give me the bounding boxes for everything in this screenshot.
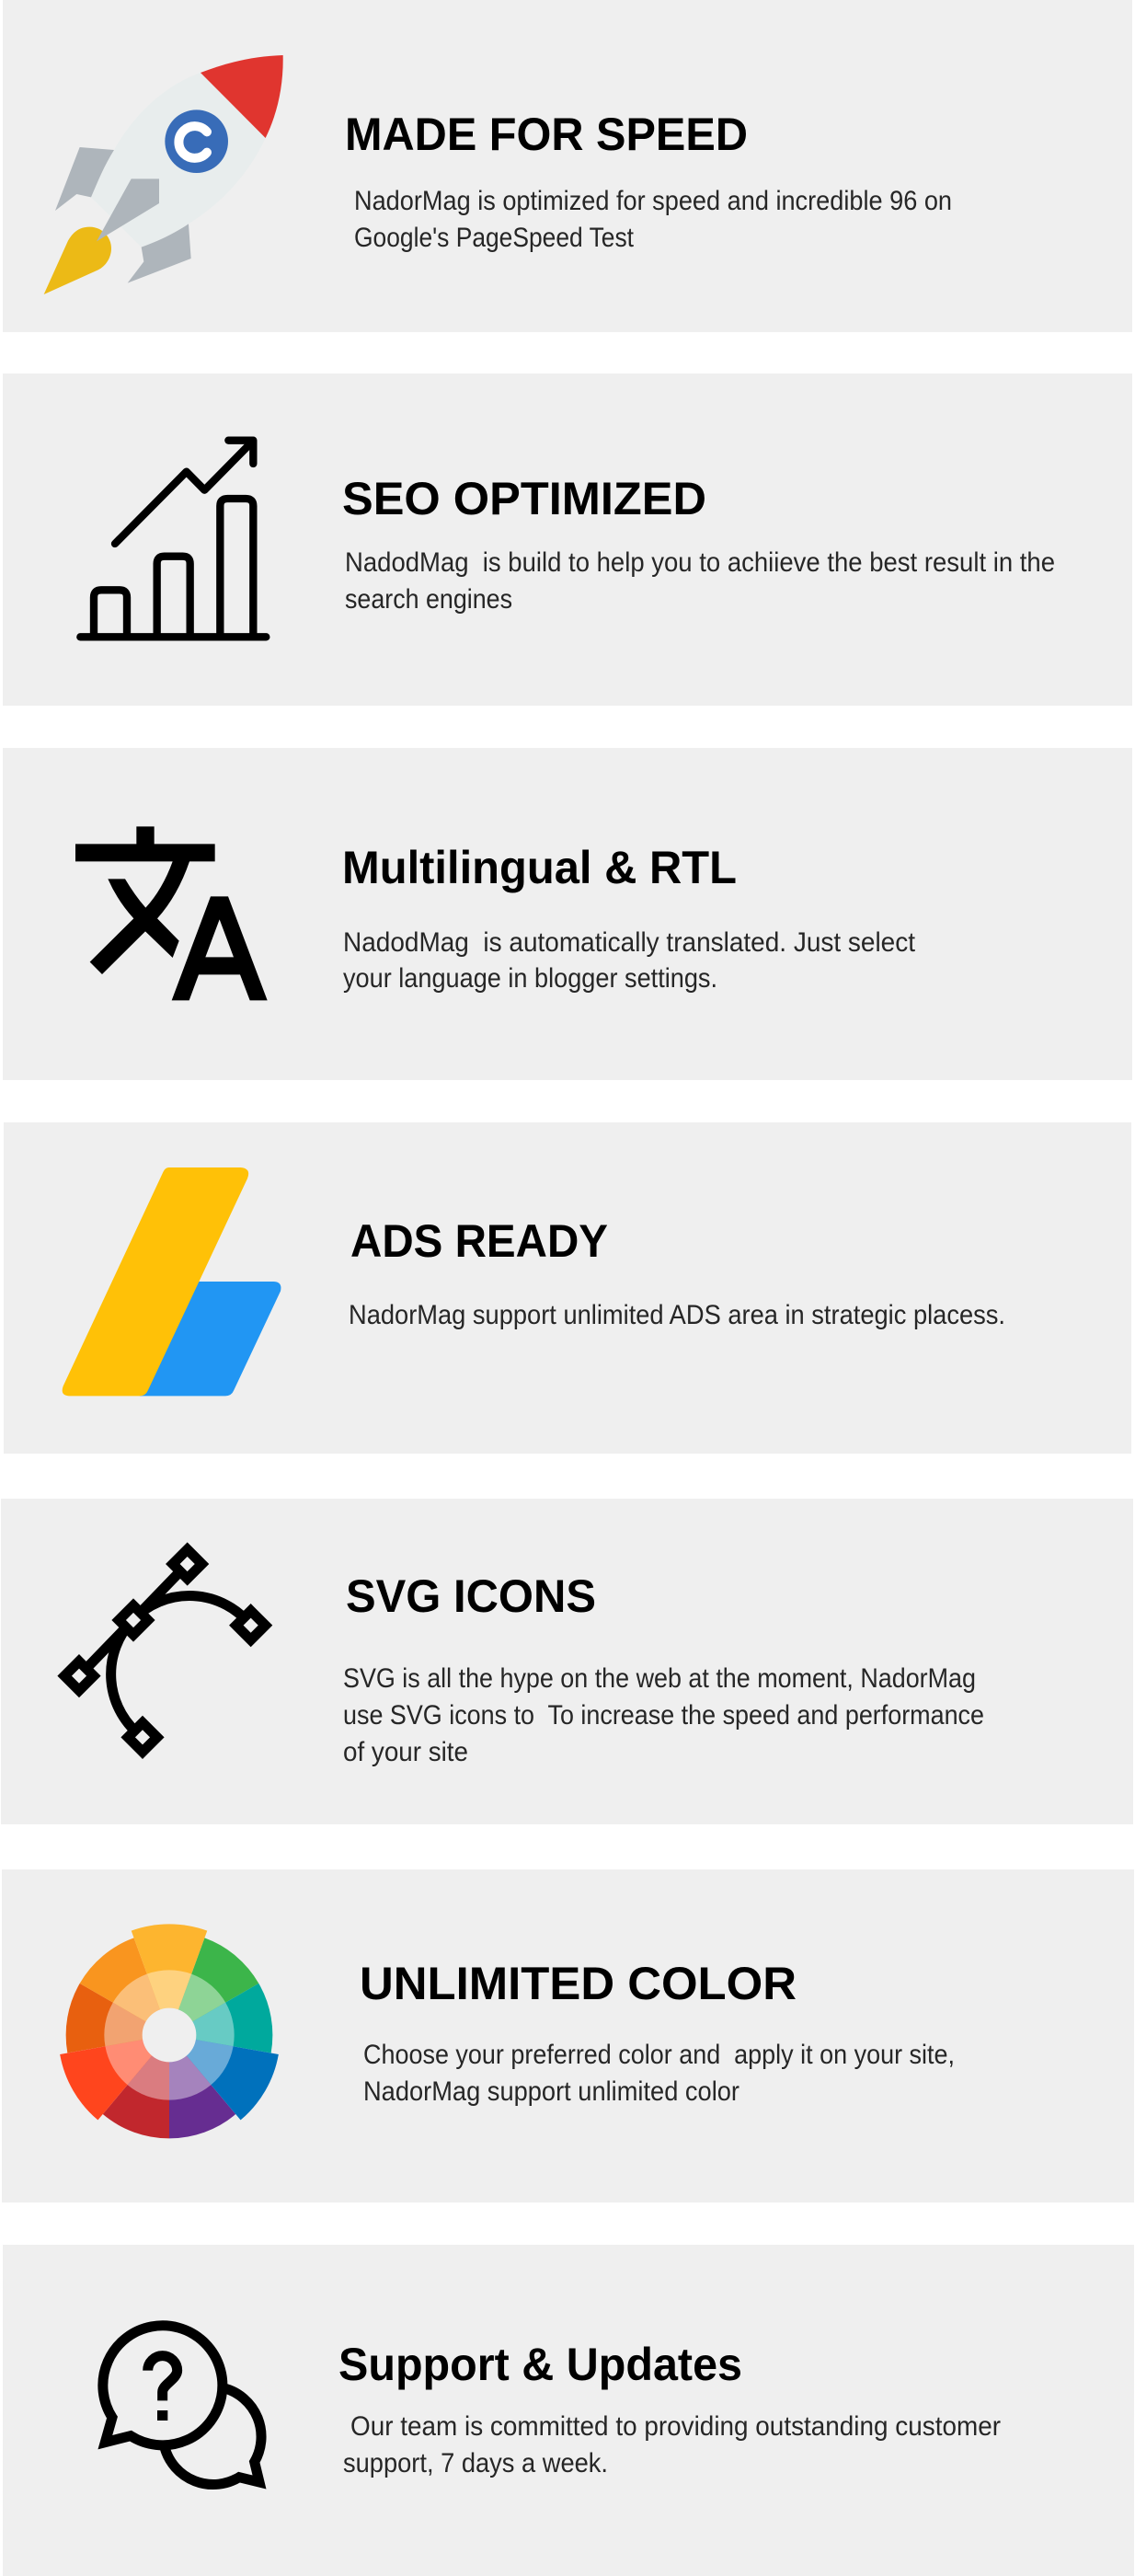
heading: unlimited color: UNLIMITED COLOR	[360, 1958, 797, 2009]
icon: bezier curve	[64, 1549, 265, 1752]
icon: rocket	[44, 55, 283, 294]
heading: support and updates: Support & Updates	[338, 2339, 742, 2390]
panel: svg icons	[1, 1499, 1133, 1824]
panel: support and updates	[3, 2245, 1134, 2576]
text: seo description: NadodMag is build to help you to achiieve the best result in the	[345, 547, 1055, 578]
panel: multilingual and rtl	[3, 748, 1132, 1080]
text: multilingual description: your language in blogger settings.	[343, 963, 717, 994]
heading: seo optimized: SEO OPTIMIZED	[342, 473, 706, 524]
text: made for speed description: NadorMag is optimized for speed and incredible 96 on	[354, 186, 952, 216]
heading: made for speed: MADE FOR SPEED	[345, 109, 748, 160]
text: svg description: use SVG icons to To increase the speed and performance	[343, 1700, 984, 1731]
icon: translate	[75, 826, 268, 1000]
heading: multilingual and rtl: Multilingual & RTL	[342, 842, 737, 893]
text: support description: support, 7 days a week.	[343, 2448, 608, 2478]
text: svg description: SVG is all the hype on the web at the moment, NadorMag	[343, 1663, 976, 1694]
panel: unlimited color	[2, 1869, 1134, 2202]
text: made for speed description: Google's PageSpeed Test	[354, 223, 635, 253]
text: multilingual description	[343, 927, 916, 994]
heading: svg icons: SVG ICONS	[346, 1570, 596, 1622]
icon: growth bar chart	[80, 441, 266, 637]
panel: ads ready	[4, 1122, 1131, 1454]
heading: ads ready: ADS READY	[350, 1215, 608, 1267]
icon: adsense logo	[63, 1167, 281, 1396]
text: support description: Our team is committed to providing outstanding customer	[350, 2411, 1001, 2442]
text: ads description: NadorMag support unlimited ADS area in strategic placess.	[349, 1300, 1005, 1330]
text: multilingual description: NadodMag is automatically translated. Just select	[343, 927, 916, 958]
text: seo description	[345, 547, 1055, 615]
icon: question chat bubbles	[103, 2326, 261, 2485]
text: support description	[343, 2411, 1001, 2478]
panel: made for speed	[3, 0, 1132, 332]
text: svg description	[343, 1663, 984, 1767]
text: unlimited color description: Choose your preferred color and apply it on your site,	[363, 2040, 955, 2070]
panel: seo optimized	[3, 374, 1132, 706]
text: svg description: of your site	[343, 1737, 468, 1767]
text: unlimited color description: NadorMag support unlimited color	[363, 2076, 739, 2107]
text: unlimited color description	[363, 2040, 955, 2107]
text: made for speed description	[354, 186, 952, 253]
icon: color wheel	[54, 1924, 284, 2145]
text: seo description: search engines	[345, 584, 512, 615]
